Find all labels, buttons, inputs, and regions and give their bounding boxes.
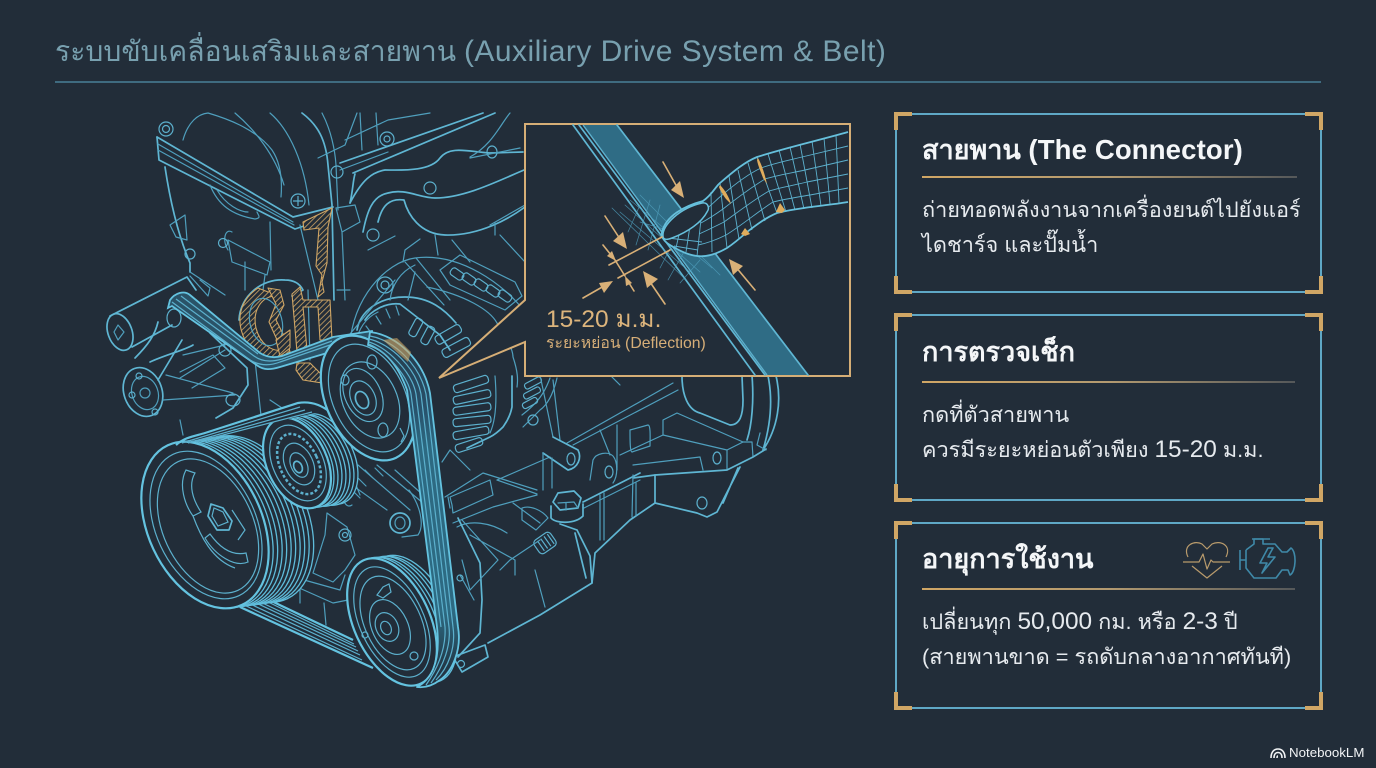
text: the connector: ไดชาร์จ และปั๊มน้ำ <box>922 232 1098 256</box>
water pump <box>102 276 285 435</box>
text: the connector: ถ่ายทอดพลังงานจากเครื่องยนต์ไปยังแอร์ <box>922 197 1301 222</box>
rear engine block and bellhousing <box>488 375 779 643</box>
belt: upper left run <box>168 293 375 369</box>
pulley: alternator <box>302 320 434 476</box>
heading: service life: อายุการใช้งาน <box>922 544 1094 574</box>
belt: long vertical run with alternator wrap <box>368 332 459 687</box>
heading: inspection: การตรวจเช็ก <box>922 337 1075 367</box>
deflection value <box>546 306 706 352</box>
boss and filler cap <box>543 437 580 470</box>
alternator <box>345 255 557 470</box>
deflection value: ระยะหย่อน (Deflection) <box>546 335 706 352</box>
left side of block <box>170 215 318 360</box>
text: service life <box>922 606 1291 668</box>
panel: inspection <box>895 314 1322 501</box>
gold hatched coolant parts <box>239 208 332 383</box>
text: the connector <box>920 194 1301 256</box>
panel: the connector <box>895 113 1322 293</box>
valve cover <box>157 113 497 300</box>
fingernail <box>663 203 708 239</box>
text: inspection: กดที่ตัวสายพาน <box>922 402 1069 427</box>
belt deflection mesh <box>612 195 720 283</box>
belt in section <box>573 125 808 375</box>
text: service life: เปลี่ยนทุก 50,000 กม. หรือ 2-3 ปี <box>922 608 1238 635</box>
callout tail and frame <box>439 124 850 378</box>
pulley: compressor <box>329 541 475 700</box>
title: ระบบขับเคลื่อนเสริมและสายพาน (Auxiliary Drive System & Belt) <box>55 35 886 68</box>
finger <box>662 132 848 256</box>
heading: the connector: สายพาน (The Connector) <box>922 134 1243 165</box>
text: service life: (สายพานขาด = รถดับกลางอากาศทันที) <box>922 644 1291 668</box>
engine block line art <box>102 113 779 672</box>
pulley: crankshaft <box>116 415 339 629</box>
deflection arrows <box>583 162 755 304</box>
panel: service life <box>895 522 1322 709</box>
icon: engine warning <box>1240 539 1295 578</box>
deflection value: 15-20 ม.ม. <box>546 306 661 333</box>
manifold rails and intake <box>318 113 525 300</box>
lower belt run <box>240 597 375 670</box>
lower block and compressor <box>297 465 540 672</box>
logo: NotebookLM: NotebookLM <box>1289 745 1364 760</box>
text: inspection <box>922 400 1264 462</box>
belt: top run crank to alternator <box>176 402 330 445</box>
icon: heart pulse <box>1183 543 1230 578</box>
text: inspection: ควรมีระยะหย่อนตัวเพียง 15-20 ม.ม. <box>922 436 1264 462</box>
pulley: idler <box>250 403 371 519</box>
